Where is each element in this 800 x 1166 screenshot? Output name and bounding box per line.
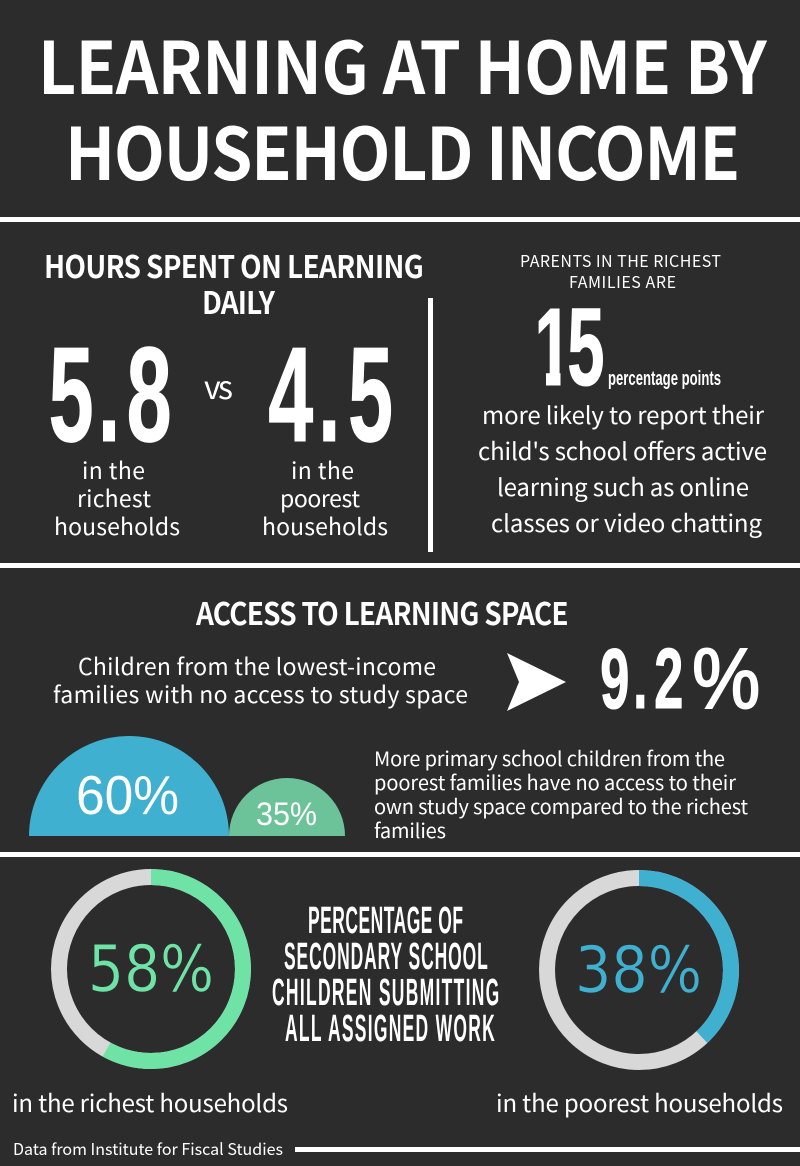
text: percentage of secondary school children: SECONDARY SCHOOL <box>284 936 488 978</box>
chart: ring 38% poorest <box>547 878 731 1062</box>
label: poorest households: in the poorest households <box>496 1084 783 1119</box>
chart: 60% semicircle: 60% <box>76 764 179 826</box>
title: HOUSEHOLD INCOME <box>65 97 740 201</box>
text: percentage of secondary school children <box>272 900 499 1050</box>
chart: 60% semicircle <box>29 736 229 836</box>
intro text: PARENTS IN THE RICHEST <box>520 248 721 272</box>
stat: poorest 4.5 <box>262 319 393 542</box>
title <box>38 11 767 201</box>
text: primary school comparison <box>374 743 748 844</box>
description: learning such as online <box>497 468 749 503</box>
description: classes or video chatting <box>491 504 762 539</box>
stat: richest 5.8 <box>49 319 180 542</box>
stat: 9.2% <box>600 631 760 727</box>
chart: ring 58% richest <box>59 877 243 1061</box>
intro text: FAMILIES ARE <box>569 269 676 293</box>
label: richest households: in the richest households <box>12 1084 288 1119</box>
stat: 15 percentage points: percentage points <box>608 368 721 390</box>
stat: poorest 4.5: 4.5 <box>268 319 393 470</box>
text: primary school comparison: own study space compared to the richest <box>374 791 748 820</box>
text: percentage of secondary school children: CHILDREN SUBMITTING <box>272 972 499 1014</box>
stat: 9.2%: 9.2 <box>600 631 683 726</box>
chart: 35% semicircle <box>229 778 345 836</box>
panel: parents in richest families <box>478 248 767 539</box>
stat: 15 percentage points: 5 <box>567 287 605 409</box>
heading: hours spent <box>44 243 424 323</box>
text: percentage of secondary school children: ALL ASSIGNED WORK <box>285 1008 495 1050</box>
text: primary school comparison: families <box>374 815 446 844</box>
heading: hours spent: HOURS SPENT ON LEARNING <box>44 243 424 287</box>
footer source: Data from Institute for Fiscal Studies <box>13 1136 283 1160</box>
stat: richest 5.8: households <box>54 508 180 542</box>
intro text <box>520 248 721 293</box>
title: LEARNING AT HOME BY <box>38 11 767 115</box>
icon: arrow <box>507 653 566 711</box>
stat: 9.2%: % <box>692 632 760 727</box>
stat: richest 5.8: richest <box>77 480 151 514</box>
description: more likely to report their <box>482 396 765 431</box>
description: child's school offers active <box>478 432 767 467</box>
chart: 35% semicircle: 35% <box>256 796 317 832</box>
heading: access: ACCESS TO LEARNING SPACE <box>195 590 569 634</box>
chart: ring 58% richest: 58% <box>88 933 214 1007</box>
text: percentage of secondary school children: PERCENTAGE OF <box>308 900 463 942</box>
stat: 15 percentage points: 1 <box>534 287 572 409</box>
stat: 15 percentage points <box>530 287 721 409</box>
text: primary school comparison: poorest families have no access to their <box>374 767 736 796</box>
stat: poorest 4.5: poorest <box>280 480 360 514</box>
panel: hours spent on learning <box>44 243 424 542</box>
panel: access to learning space <box>29 590 760 844</box>
text: no access to study space <box>53 648 468 710</box>
stat: richest 5.8: in the <box>82 452 145 486</box>
stat: richest 5.8: 5.8 <box>49 319 172 470</box>
panel: submitted work <box>12 877 783 1119</box>
text: primary school comparison: More primary school children from the <box>374 743 725 772</box>
text: no access to study space: Children from the lowest-income <box>78 648 436 682</box>
label: vs: vs <box>204 363 233 409</box>
text: no access to study space: families with no access to study space <box>53 676 468 710</box>
heading: hours spent: DAILY <box>202 279 276 323</box>
stat: poorest 4.5: in the <box>291 452 354 486</box>
description <box>478 396 767 539</box>
stat: poorest 4.5: households <box>262 508 388 542</box>
chart: ring 38% poorest: 38% <box>575 934 702 1008</box>
